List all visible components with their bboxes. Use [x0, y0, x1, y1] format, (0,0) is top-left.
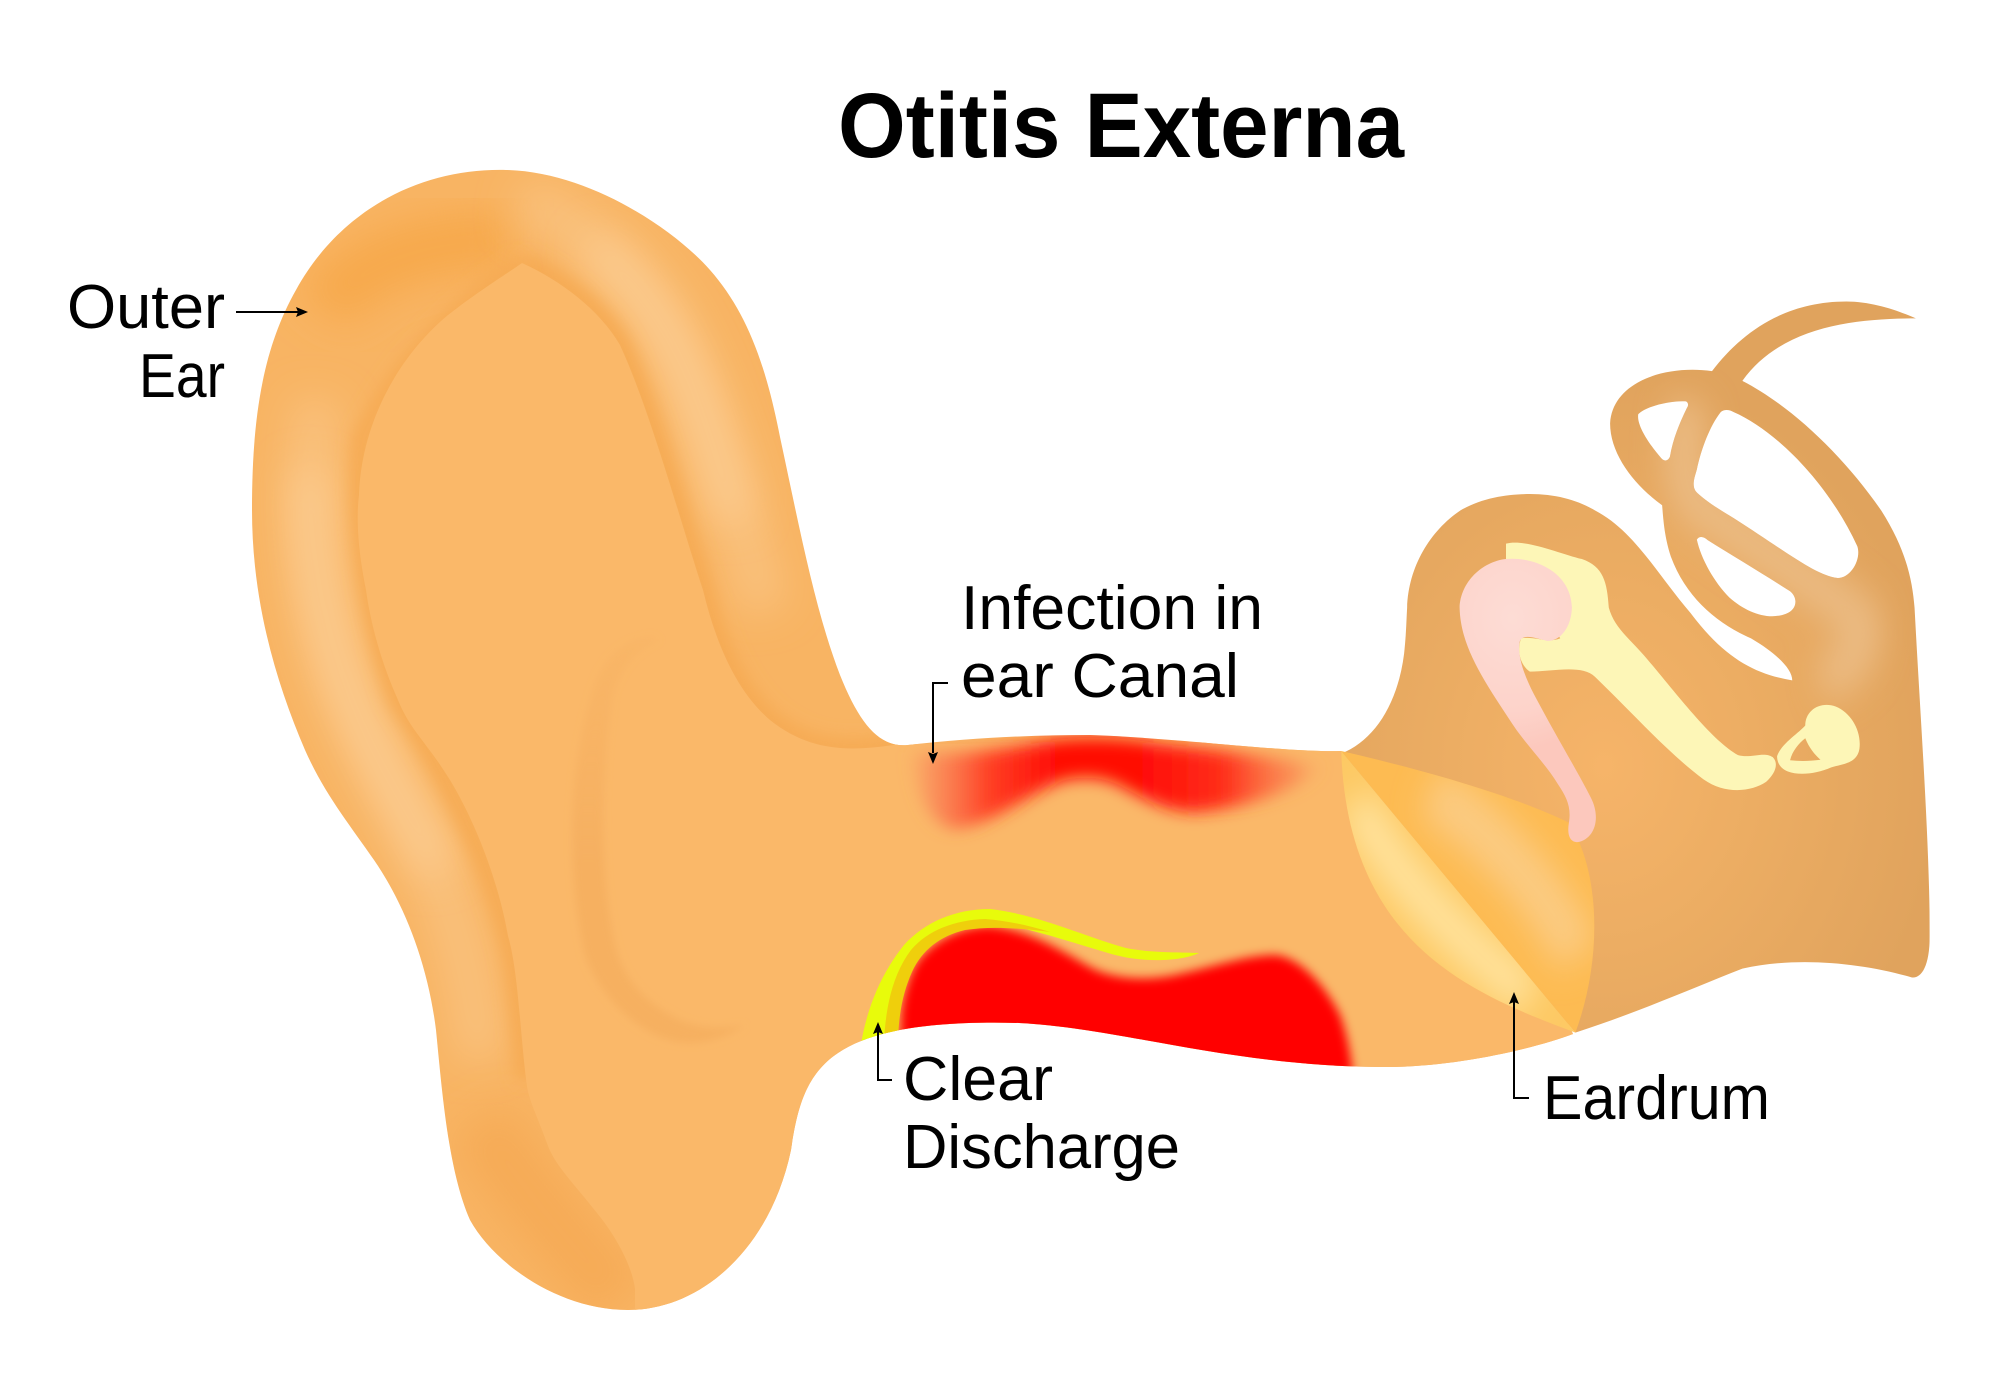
infection: upper canal	[911, 738, 1325, 829]
arrow: clear discharge	[873, 1022, 892, 1080]
title: Otitis Externa	[838, 75, 1405, 177]
label: clear discharge: Discharge	[903, 1113, 1180, 1182]
label: outer ear: Outer	[67, 273, 225, 342]
stapes bone	[1777, 705, 1860, 774]
outer ear and canal body	[240, 160, 1620, 1340]
label: clear discharge: Clear	[903, 1045, 1053, 1114]
label: outer ear: Ear	[139, 342, 225, 411]
antitragus fold	[578, 847, 710, 1038]
incus and malleus bones	[1506, 543, 1776, 790]
discharge inner band	[884, 919, 1050, 1045]
arrow: eardrum	[1509, 992, 1529, 1098]
label: infection in ear canal: ear Canal	[961, 642, 1239, 711]
clear discharge	[860, 909, 1199, 1050]
middle ear and cochlear canals	[1339, 295, 1933, 1043]
ear anatomy illustration	[240, 160, 1933, 1340]
label: eardrum: Eardrum	[1543, 1064, 1770, 1133]
label: clear discharge	[903, 1045, 1180, 1182]
eardrum	[1341, 751, 1594, 1032]
arrow: outer ear	[236, 307, 308, 317]
inner ear concha	[358, 263, 1620, 1340]
label: infection in ear canal	[961, 574, 1263, 711]
infection: lower canal	[900, 926, 1353, 1075]
arrow: infection	[928, 683, 948, 764]
label: infection in ear canal: Infection in	[961, 574, 1263, 643]
pink malleus handle	[1460, 559, 1596, 842]
label: outer ear	[67, 273, 225, 411]
